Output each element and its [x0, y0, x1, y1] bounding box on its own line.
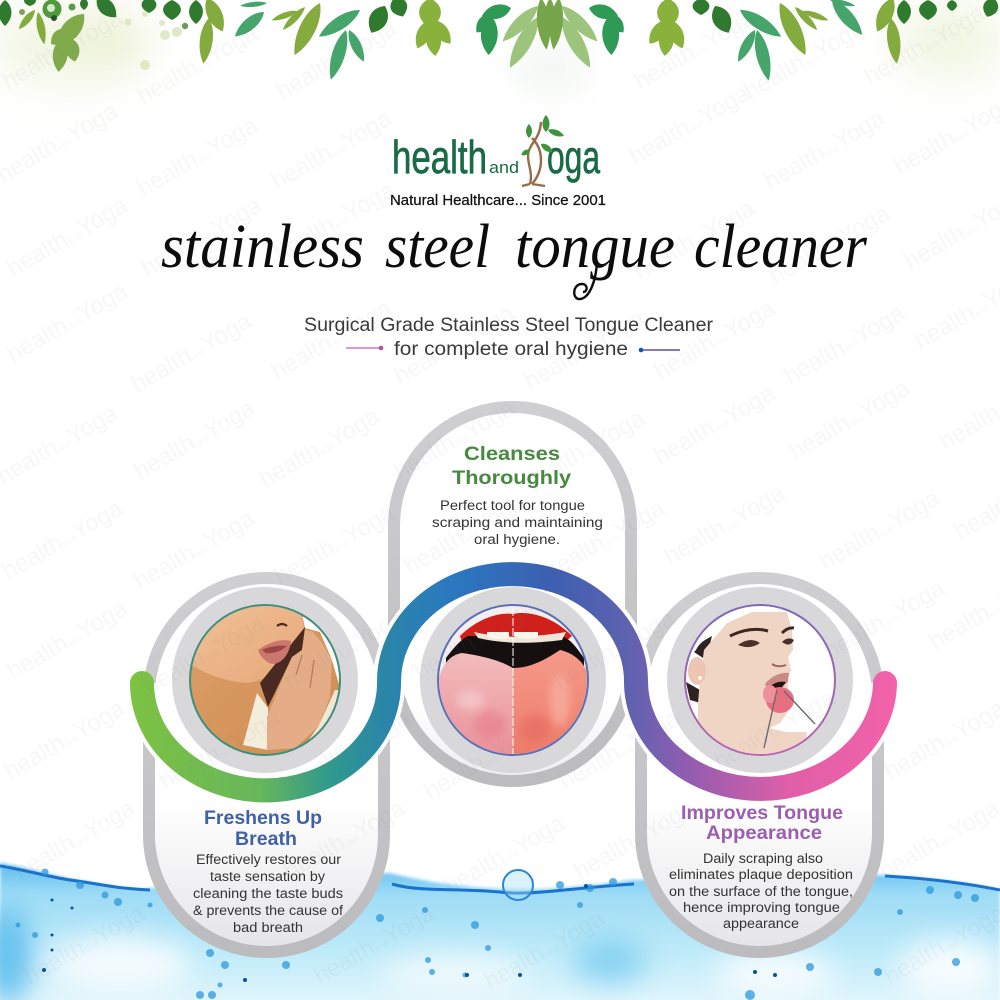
text: freshens up breath: bad breath: [233, 920, 303, 935]
watermark: repeated brand text: healthandYoga: [0, 4, 128, 95]
photo: woman scraping tongue: [680, 600, 840, 760]
watermark: repeated brand text: healthandYoga: [0, 694, 130, 785]
watermark: repeated brand text: healthandYoga: [310, 899, 440, 990]
watermark: repeated brand text: healthandYoga: [520, 404, 650, 495]
watermark: repeated brand text: healthandYoga: [740, 14, 870, 105]
capsule: improves tongue appearance (right): [641, 578, 878, 952]
logo: health and yoga: oga: [547, 131, 600, 183]
text: improves tongue appearance: [669, 802, 853, 931]
watermark: repeated brand text: healthandYoga: [3, 277, 133, 368]
watermark: repeated brand text: healthandYoga: [266, 104, 397, 195]
watermark: repeated brand text: healthandYoga: [630, 4, 760, 95]
text: freshens up breath: [193, 807, 343, 935]
watermark: repeated brand text: healthandYoga: [554, 704, 685, 795]
watermark: repeated brand text: healthandYoga: [266, 294, 397, 385]
logo: health and yoga: and: [489, 158, 519, 177]
text: cleanses thoroughly: [432, 443, 603, 547]
text: improves tongue appearance: Improves Tongue: [681, 802, 843, 824]
capsule: cleanses thoroughly (centre): [394, 407, 631, 781]
watermark: repeated brand text: healthandYoga: [126, 307, 257, 398]
logo: health and yoga: health: [392, 131, 487, 183]
text: improves tongue appearance: hence improving tongue: [683, 900, 840, 915]
watermark: repeated brand text: healthandYoga: [390, 299, 520, 390]
title: tongue: [515, 213, 675, 281]
title: stainless: [161, 213, 364, 281]
text: freshens up breath: Breath: [235, 828, 297, 850]
subtitle: for complete oral hygiene: [394, 339, 628, 360]
watermark: repeated brand text: healthandYoga: [550, 604, 680, 695]
text: improves tongue appearance: on the surface of the tongue,: [669, 884, 853, 899]
S-curve gradient ribbon: [142, 574, 885, 790]
photo: tongue before and after: [435, 600, 595, 760]
photo: person covering mouth: [189, 600, 345, 756]
text: cleanses thoroughly: Thoroughly: [452, 467, 571, 489]
watermark: repeated brand text: healthandYoga: [254, 402, 385, 493]
watermark: repeated brand text: healthandYoga: [390, 394, 520, 485]
watermark: repeated brand text: healthandYoga: [400, 489, 530, 580]
text: freshens up breath: & prevents the cause of: [193, 903, 343, 918]
text: freshens up breath: Freshens Up: [204, 807, 322, 829]
watermark: repeated brand text: healthandYoga: [20, 899, 150, 990]
watermark: repeated brand text: healthandYoga: [140, 609, 270, 700]
watermark: repeated brand text: healthandYoga: [710, 684, 840, 775]
text: cleanses thoroughly: scraping and maintaining: [432, 515, 603, 530]
watermark: repeated brand text: healthandYoga: [270, 176, 400, 267]
watermark: repeated brand text: healthandYoga: [764, 199, 895, 290]
watermark: repeated brand text: healthandYoga: [154, 704, 285, 795]
watermark: repeated brand text: healthandYoga: [130, 504, 260, 595]
watermark: repeated brand text: healthandYoga: [540, 494, 670, 585]
watermark: repeated brand text: healthandYoga: [784, 374, 915, 465]
text: improves tongue appearance: appearance: [723, 916, 799, 931]
water band at bottom: [0, 863, 1000, 1000]
watermark: repeated brand text: healthandYoga: [280, 794, 410, 885]
text: cleanses thoroughly: Perfect tool for tongue: [440, 498, 585, 513]
title: [161, 213, 868, 299]
watermark: repeated brand text: healthandYoga: [272, 14, 402, 105]
watermark: repeated brand text: healthandYoga: [420, 714, 550, 805]
tagline: Natural Healthcare... Since 2001: [390, 193, 606, 209]
text: improves tongue appearance: Daily scraping also: [703, 851, 823, 866]
title: steel: [385, 213, 490, 281]
subtitle: [304, 315, 714, 360]
watermark: repeated brand text: healthandYoga: [270, 499, 400, 590]
watermark: repeated brand text: healthandYoga: [780, 299, 910, 390]
watermark: repeated brand text: healthandYoga: [820, 574, 950, 665]
watermark: repeated brand text: healthandYoga: [10, 794, 140, 885]
watermark: repeated brand text: healthandYoga: [520, 304, 650, 395]
watermark: repeated brand text: healthandYoga: [650, 379, 780, 470]
watermark: repeated brand text: healthandYoga: [132, 19, 263, 110]
ribbon halo: [142, 574, 885, 790]
accent line: blue: [639, 348, 680, 352]
inner gray rings: [172, 587, 853, 773]
watermark: repeated brand text: healthandYoga: [280, 604, 410, 695]
watermark: repeated brand text: healthandYoga: [3, 594, 133, 685]
watermark: repeated brand text: healthandYoga: [130, 394, 260, 485]
watermark: repeated brand text: healthandYoga: [570, 794, 700, 885]
logo: health and yoga: [392, 115, 600, 186]
text: cleanses thoroughly: Cleanses: [464, 443, 560, 465]
text: cleanses thoroughly: oral hygiene.: [474, 532, 560, 547]
text: freshens up breath: Effectively restores our: [196, 852, 342, 867]
watermark: repeated brand text: healthandYoga: [624, 79, 755, 170]
capsule: freshens up breath (left): [149, 578, 384, 952]
watermark: repeated brand text: healthandYoga: [136, 191, 267, 282]
watermark: repeated brand text: healthandYoga: [660, 479, 790, 570]
watermark: repeated brand text: healthandYoga: [630, 194, 760, 285]
text: freshens up breath: taste sensation by: [210, 869, 325, 884]
watermark: repeated brand text: healthandYoga: [284, 704, 415, 795]
watermark: repeated brand text: healthandYoga: [132, 111, 263, 202]
foliage border: [0, 0, 1000, 82]
watermark: repeated brand text: healthandYoga: [814, 484, 945, 575]
watermark: repeated brand text: healthandYoga: [410, 594, 540, 685]
watermark: repeated brand text: healthandYoga: [440, 809, 570, 900]
watermark: repeated brand text: healthandYoga: [760, 104, 890, 195]
subtitle: Surgical Grade Stainless Steel Tongue Cleaner: [304, 315, 714, 336]
watermark: repeated brand text: healthandYoga: [0, 494, 128, 585]
watermark: repeated brand text: healthandYoga: [860, 0, 990, 90]
accent line: pink: [346, 346, 383, 350]
text: improves tongue appearance: eliminates plaque deposition: [669, 867, 853, 882]
text: improves tongue appearance: Appearance: [706, 822, 822, 844]
watermark: repeated brand text: healthandYoga: [480, 904, 610, 995]
watermark: repeated brand text: healthandYoga: [3, 191, 133, 282]
watermark: repeated brand text: healthandYoga: [650, 294, 780, 385]
title: cleaner: [694, 213, 868, 281]
green wash behind foliage: [0, 4, 1000, 83]
text: freshens up breath: cleaning the taste buds: [193, 886, 343, 901]
